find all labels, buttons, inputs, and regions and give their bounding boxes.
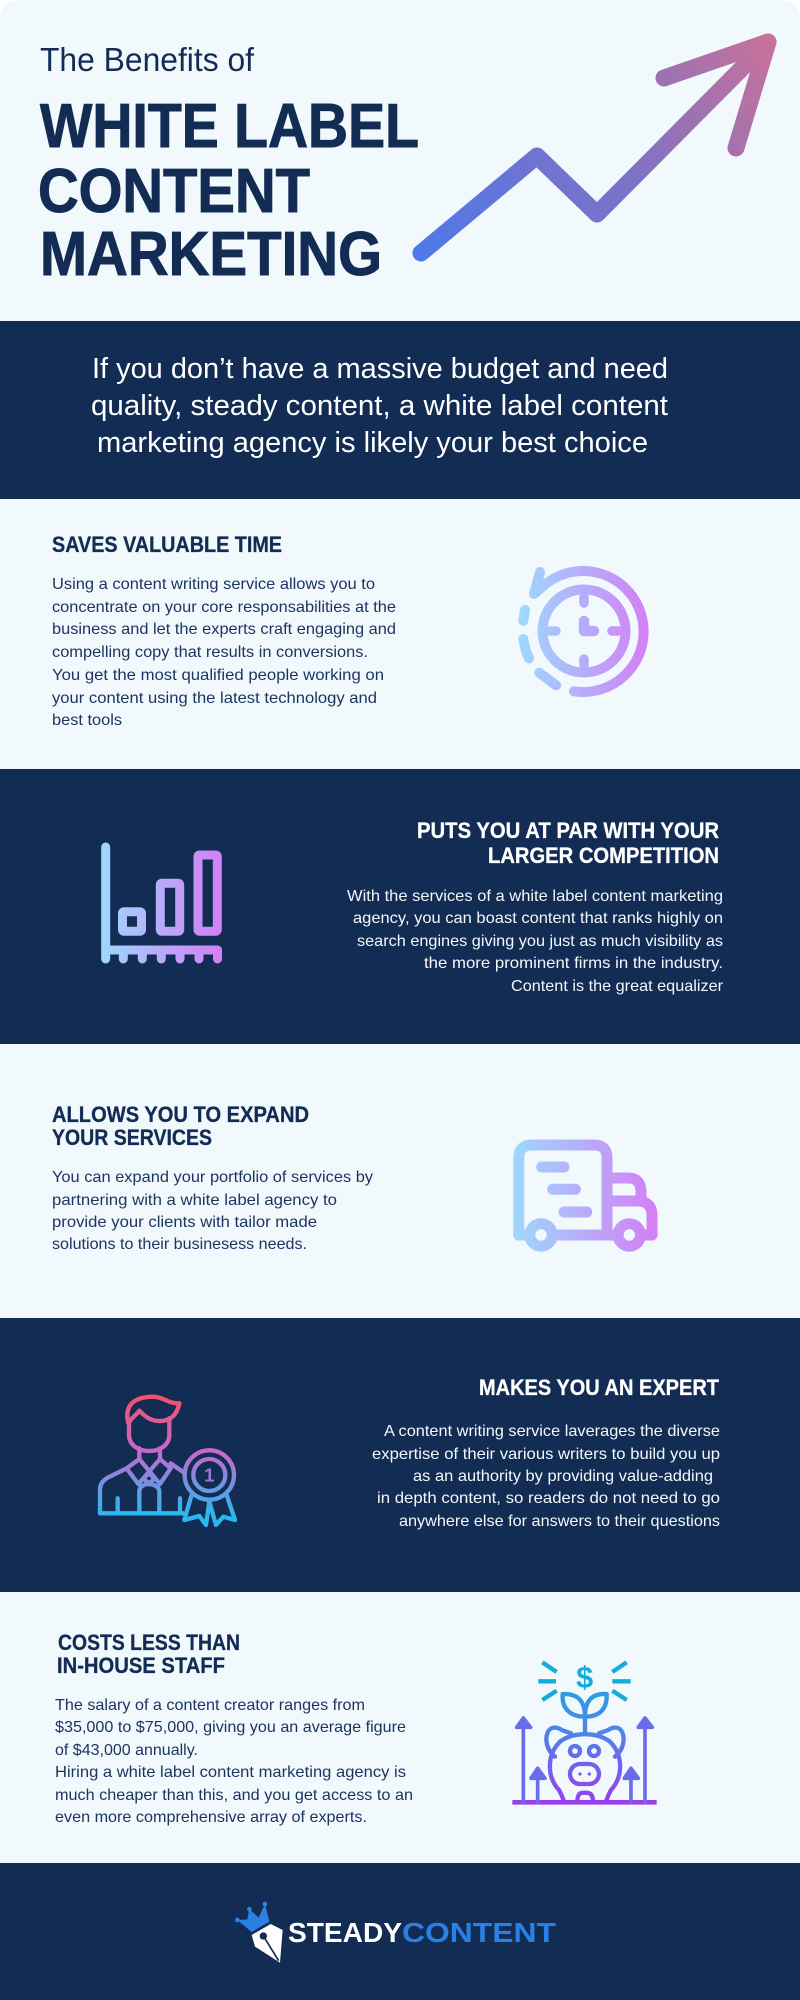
body text: your content using the latest technology and [52, 690, 377, 707]
icon: expert with award ribbon: 1 [204, 1464, 215, 1485]
body text: compelling copy that results in conversions. [52, 644, 368, 661]
panel: footer [0, 1863, 800, 2000]
panel: intro band [0, 321, 800, 499]
heading: COSTS LESS THAN [58, 1630, 240, 1655]
body text [52, 1169, 373, 1253]
body text [52, 576, 396, 729]
body text: of $43,000 annually. [55, 1742, 198, 1759]
heading [52, 1102, 309, 1150]
panel: header [0, 0, 800, 321]
body text [372, 1423, 720, 1530]
icon: bar chart [106, 847, 218, 959]
body text: The salary of a content creator ranges from [55, 1697, 365, 1714]
subtitle: The Benefits of [40, 41, 255, 78]
icon: expert with award ribbon [100, 1397, 235, 1525]
body text: anywhere else for answers to their questions [399, 1513, 720, 1530]
logo wordmark: content: CONTENT [402, 1917, 556, 1948]
logo wordmark: steady: STEADY [288, 1917, 402, 1948]
body text: the more prominent firms in the industry. [424, 955, 723, 972]
intro text: quality, steady content, a white label content [91, 390, 668, 422]
heading [417, 818, 719, 868]
panel: makes you an expert [0, 1318, 800, 1592]
panel: allows you to expand [0, 1044, 800, 1318]
panel: puts you at par [0, 769, 800, 1044]
intro text [91, 353, 668, 459]
body text: Using a content writing service allows you to [52, 576, 375, 593]
heading: LARGER COMPETITION [488, 843, 719, 868]
body text: provide your clients with tailor made [52, 1214, 317, 1231]
body text: Hiring a white label content marketing agency is [55, 1764, 406, 1781]
body text: $35,000 to $75,000, giving you an average figure [55, 1719, 406, 1736]
icon: piggy bank with plant [512, 1660, 657, 1802]
body text [55, 1697, 413, 1826]
intro text: If you don’t have a massive budget and need [92, 353, 668, 385]
heading: PUTS YOU AT PAR WITH YOUR [417, 818, 719, 843]
body text: partnering with a white label agency to [52, 1192, 337, 1209]
body text: agency, you can boast content that ranks highly on [353, 910, 723, 927]
icon: delivery truck [519, 1145, 652, 1246]
body text: With the services of a white label content marketing [347, 888, 723, 905]
body text: Content is the great equalizer [511, 978, 724, 995]
icon: piggy bank with plant: $ [576, 1660, 593, 1694]
heading: MAKES YOU AN EXPERT [479, 1375, 720, 1400]
panel: costs less than in-house staff [0, 1592, 800, 1863]
body text: solutions to their businesess needs. [52, 1236, 307, 1253]
heading: IN-HOUSE STAFF [57, 1653, 225, 1678]
title: MARKETING [40, 220, 382, 289]
body text [347, 888, 724, 995]
heading [57, 1630, 240, 1678]
title [38, 92, 419, 289]
body text: search engines giving you just as much visibility as [357, 933, 723, 950]
body text: concentrate on your core responsabilities at the [52, 599, 396, 616]
heading: YOUR SERVICES [52, 1125, 212, 1150]
logo [235, 1902, 556, 1963]
body text: in depth content, so readers do not need to go [377, 1490, 720, 1507]
icon: crown and pen nib [235, 1902, 283, 1963]
title: WHITE LABEL [40, 92, 419, 161]
panel: saves valuable time [0, 499, 800, 769]
body text: You can expand your portfolio of services by [52, 1169, 373, 1186]
body text: A content writing service laverages the diverse [384, 1423, 720, 1440]
body text: business and let the experts craft engaging and [52, 621, 396, 638]
body text: expertise of their various writers to build you up [372, 1446, 720, 1463]
body text: You get the most qualified people working on [52, 667, 384, 684]
heading: SAVES VALUABLE TIME [52, 532, 282, 557]
intro text: marketing agency is likely your best choice [97, 427, 648, 459]
arrow: rising trend [421, 42, 768, 253]
body text: best tools [52, 712, 122, 729]
icon: clock with circular arrow [523, 571, 644, 692]
body text: as an authority by providing value-adding [413, 1468, 713, 1485]
title: CONTENT [38, 157, 310, 226]
body text: even more comprehensive array of experts. [55, 1809, 367, 1826]
heading: ALLOWS YOU TO EXPAND [52, 1102, 309, 1127]
body text: much cheaper than this, and you get access to an [55, 1787, 413, 1804]
